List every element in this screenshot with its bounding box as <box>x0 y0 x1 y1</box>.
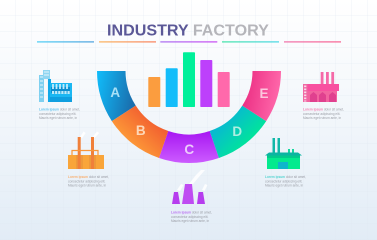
text block: B: Mauris eget rutrum ante, in <box>68 184 106 188</box>
segment D <box>210 106 266 158</box>
text block: C: consectetur adipiscing elit. <box>171 215 208 219</box>
segment C <box>159 131 219 163</box>
text block: D: Lorem ipsum dolor sit amet, <box>265 175 306 179</box>
text block: C: Mauris eget rutrum ante, in <box>171 219 209 223</box>
text block: B: Lorem ipsum dolor sit amet, <box>68 175 109 179</box>
segment C: C <box>184 142 194 157</box>
segment A: A <box>110 85 120 100</box>
semicircle segmented chart <box>97 71 281 163</box>
text block: A: Lorem ipsum dolor sit amet, <box>39 108 80 112</box>
title underlines <box>37 41 341 42</box>
text block: E: consectetur adipiscing elit. <box>303 112 340 116</box>
text block: D: consectetur adipiscing elit. <box>265 179 302 183</box>
segment B <box>112 106 168 158</box>
icon: pink factory <box>303 72 339 102</box>
title: INDUSTRY FACTORY <box>107 21 269 39</box>
segment E <box>242 71 281 121</box>
text block: A: consectetur adipiscing elit. <box>39 112 76 116</box>
icon: orange factory <box>68 132 104 169</box>
text block: B: consectetur adipiscing elit. <box>68 179 105 183</box>
text block: A: Mauris eget rutrum ante, in <box>39 116 77 120</box>
text block: D: Mauris eget rutrum ante, in <box>265 184 303 188</box>
icon: blue factory <box>39 70 72 102</box>
text block: E: Mauris eget rutrum ante, in <box>303 116 341 120</box>
bar chart <box>148 52 230 107</box>
segment B: B <box>136 123 146 138</box>
icon: green factory <box>265 138 302 169</box>
segment D: D <box>232 124 242 139</box>
segment A <box>97 71 136 121</box>
text block: C: Lorem ipsum dolor sit amet, <box>171 210 212 214</box>
segment E: E <box>259 86 269 101</box>
icon: purple cooling towers <box>172 170 208 204</box>
text block: E: Lorem ipsum dolor sit amet, <box>303 108 344 112</box>
